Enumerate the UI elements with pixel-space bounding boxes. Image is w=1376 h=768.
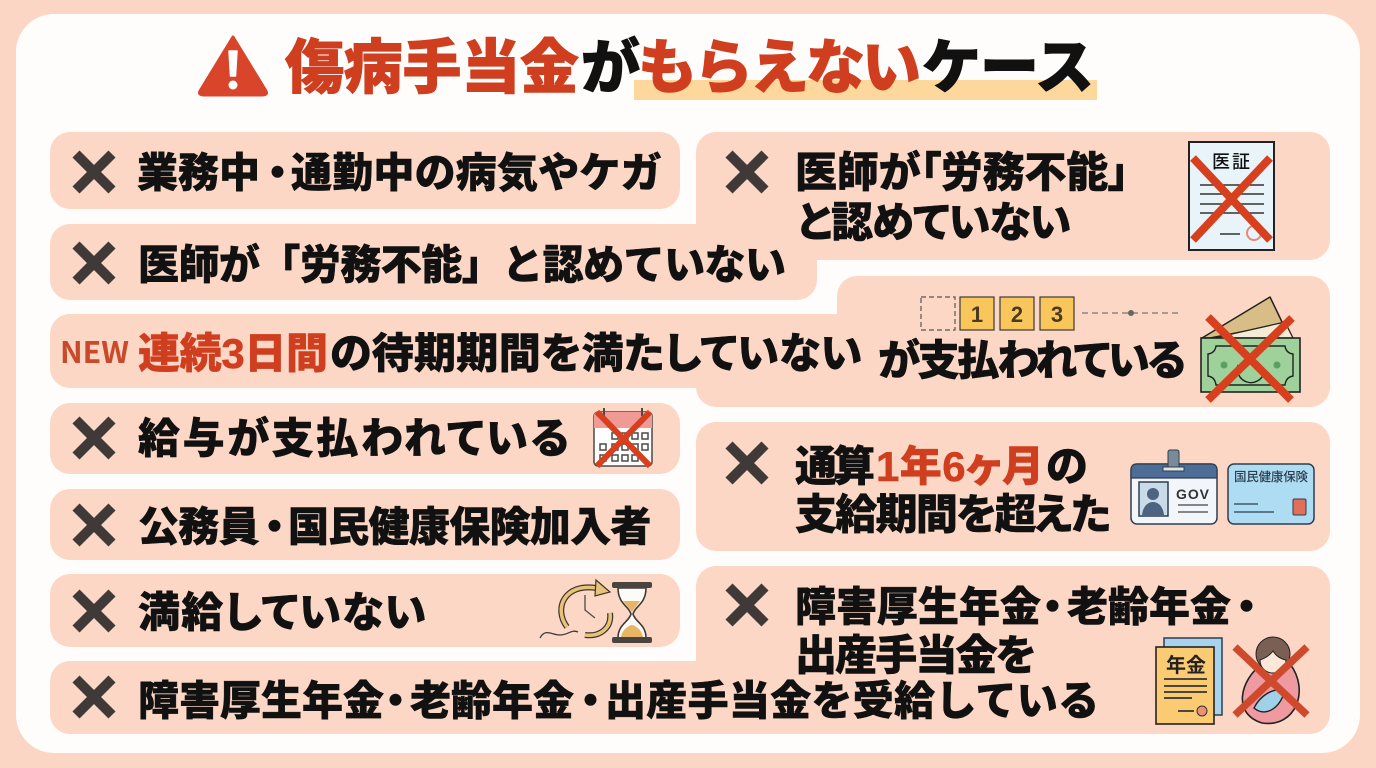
item text: の待期期間を満たしていない [330,330,862,377]
icon: health insurance card: 国民健康保険 [1234,469,1308,484]
icon: crossed medical certificate: 医証 [1212,152,1250,172]
icon: x mark [76,507,112,543]
item: pension recipients (left) [76,678,1099,724]
day boxes: 2 [1011,302,1023,327]
title [200,35,1097,101]
item: civil servants [76,504,651,550]
item: salary paid (left) [76,408,652,466]
item: doctor not certified [76,242,786,288]
icon: id card [1131,450,1217,524]
text line 2: と認めていない [797,199,1071,246]
item text: ・ [375,678,416,724]
day boxes: 1 [971,302,983,327]
icon: clock arrows and hourglass [540,580,652,643]
item text: 医師が「労務不能」と認めていない [138,242,786,288]
title text: red part: 傷病手当金 [285,35,579,101]
item text: ・ [254,504,294,550]
text line 1: 通算 [795,443,875,490]
icon: x mark [76,245,112,281]
panel shapes [50,132,1330,734]
panel: doctor not certified (right) [729,142,1274,250]
new label: NEW [60,328,129,372]
icon: x mark [76,154,112,190]
icon: x mark [729,154,765,190]
icon: pension document: 年金 [1166,654,1206,677]
icon: crossed calendar [594,408,652,466]
text line 2: 支給期間を超えた [795,491,1111,538]
item text: 満給していない [138,589,426,636]
icon: x mark [76,420,112,456]
item text: 給与が支払われている [138,415,569,462]
text line 1: ・ [1226,584,1267,630]
title highlight [634,80,1097,100]
panel: 18 month limit [729,443,1314,538]
icon: pension document [1156,638,1222,724]
panel: salary paid (right) [878,297,1300,400]
item text: ・ [570,678,611,724]
item text: 出産手当金を受給している [605,678,1099,724]
item text: 障害厚生年金 [138,678,384,724]
panel: pension recipients (right) [729,584,1307,724]
text line 1: 医師が「労務不能」 [795,149,1129,196]
item text: 通勤中の病気やケガ [291,150,662,196]
title text: moraenai: もらえない [638,35,921,101]
text line 2: 出産手当金を [795,632,1036,679]
item text: 業務中 [137,150,260,196]
day boxes [921,297,1180,330]
icon: health insurance card [1228,464,1314,524]
item text: が支払われている [878,337,1186,384]
icon: x mark [729,587,765,623]
text line 1: 老齢年金 [1067,584,1231,630]
icon: id card: GOV [1176,486,1210,502]
item: waiting period [60,328,862,377]
title text: ga: が [581,35,640,101]
icon: x mark [76,593,112,629]
text line 1: 障害厚生年金 [795,584,1041,630]
icon: crossed mother and baby [1235,637,1307,723]
item: work injury [76,150,662,196]
item text: ・ [257,150,298,196]
text line 1 [795,443,1087,490]
item: not full salary [76,580,652,643]
icon: warning triangle [200,37,266,95]
icon: crossed medical certificate [1189,142,1274,250]
title text: case: ケース [922,35,1094,101]
day boxes: 3 [1051,302,1063,327]
item text: 公務員 [138,504,260,550]
highlighted text: 連続3日間 [138,330,328,377]
text line 1: の [1046,443,1087,490]
text line 1: 1年6ヶ月 [876,443,1044,490]
icon: x mark [76,679,112,715]
item text: 老齢年金 [410,678,574,724]
icon: x mark [729,445,765,481]
text line 1: ・ [1032,584,1073,630]
item text: 国民健康保険加入者 [288,504,651,550]
icon: crossed banknote wallet [1201,297,1300,400]
